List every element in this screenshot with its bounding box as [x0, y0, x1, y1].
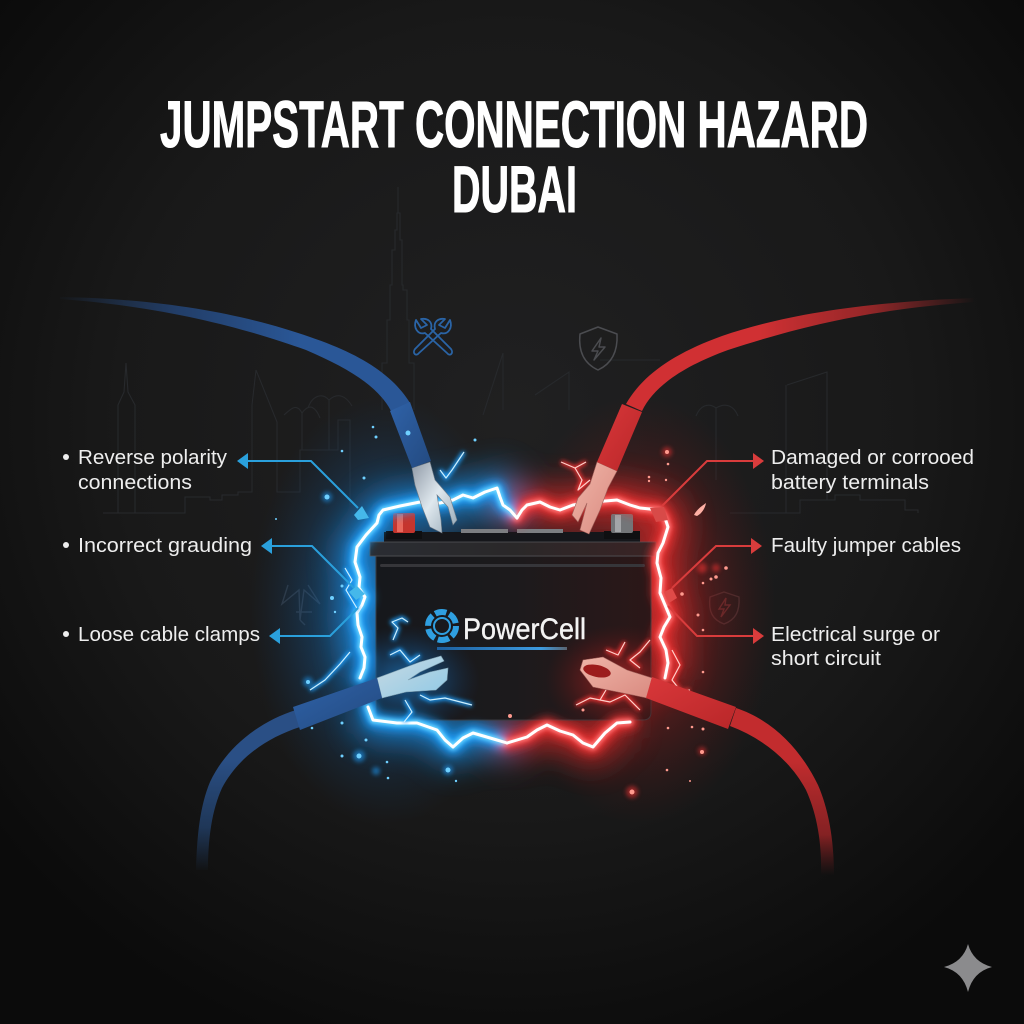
- label: loose cable clamps: Loose cable clamps: [78, 624, 260, 646]
- cable: red top: [626, 298, 974, 411]
- label: damaged terminals: battery terminals: [771, 472, 929, 494]
- logo wordmark: PowerCell: [463, 613, 586, 646]
- skyline: faint Dubai outline: [103, 187, 918, 513]
- cable: red bottom: [730, 708, 834, 875]
- label: incorrect grauding: Incorrect grauding: [78, 535, 252, 557]
- branch sparks: blue: [310, 452, 472, 722]
- sleeve: [293, 678, 382, 730]
- battery: [330, 513, 695, 735]
- label: faulty jumper cables: Faulty jumper cables: [771, 535, 961, 557]
- title: [160, 87, 868, 226]
- jaw opening: [582, 662, 612, 680]
- clamp: blue top: [390, 402, 457, 533]
- cable: blue top: [60, 297, 410, 411]
- clamp: red bottom: [580, 657, 736, 729]
- arrow: damaged terminals: [650, 453, 764, 522]
- left callouts: [63, 447, 369, 646]
- negative terminal: [604, 514, 640, 539]
- battery body: [376, 556, 651, 720]
- arrow: incorrect grauding: [261, 538, 365, 600]
- particles: blue: [275, 426, 476, 782]
- arrow: electrical surge: [668, 606, 764, 644]
- title: DUBAI: [452, 152, 577, 226]
- clamp: red top: [572, 404, 642, 534]
- inner glow: lower corners: [330, 625, 695, 735]
- label: damaged terminals: [771, 447, 974, 494]
- positive terminal: [386, 513, 422, 539]
- label: reverse polarity: [63, 447, 227, 494]
- icon: faint clamp glyph: [282, 585, 320, 625]
- branch sparks: red: [561, 462, 690, 710]
- label: electrical surge: short circuit: [771, 648, 881, 670]
- label: reverse polarity: Reverse polarity: [78, 447, 227, 469]
- streak spark: [694, 503, 706, 516]
- sleeve: [646, 677, 736, 729]
- particles: red: [508, 447, 728, 798]
- sleeve: [597, 404, 642, 471]
- arrow: reverse polarity: [237, 453, 369, 520]
- battery lid: [370, 542, 656, 556]
- lid groove: [380, 564, 645, 567]
- label: reverse polarity: connections: [78, 472, 192, 494]
- vent strips: [461, 529, 563, 533]
- energy glow: [250, 395, 775, 825]
- battery top plate: [384, 532, 640, 542]
- clamp: blue bottom: [293, 656, 448, 730]
- arrow: faulty cables: [664, 538, 762, 603]
- icon: wrenches: [414, 319, 452, 355]
- sleeve: [390, 402, 431, 468]
- logo underline: [437, 647, 567, 650]
- cable: blue bottom: [196, 710, 300, 870]
- right callouts: [650, 447, 974, 670]
- icon: shield with bolt: [580, 327, 617, 370]
- arrow: loose clamps: [269, 608, 358, 644]
- icon: faint shield: [710, 592, 739, 624]
- label: electrical surge: [771, 624, 940, 670]
- label: electrical surge: Electrical surge or: [771, 624, 940, 646]
- icon: sparkle watermark: [944, 944, 992, 992]
- label: damaged terminals: Damaged or corrooed: [771, 447, 974, 469]
- lightning frame: [355, 488, 670, 747]
- logo mark: [428, 612, 456, 640]
- logo: PowerCell: [428, 612, 586, 650]
